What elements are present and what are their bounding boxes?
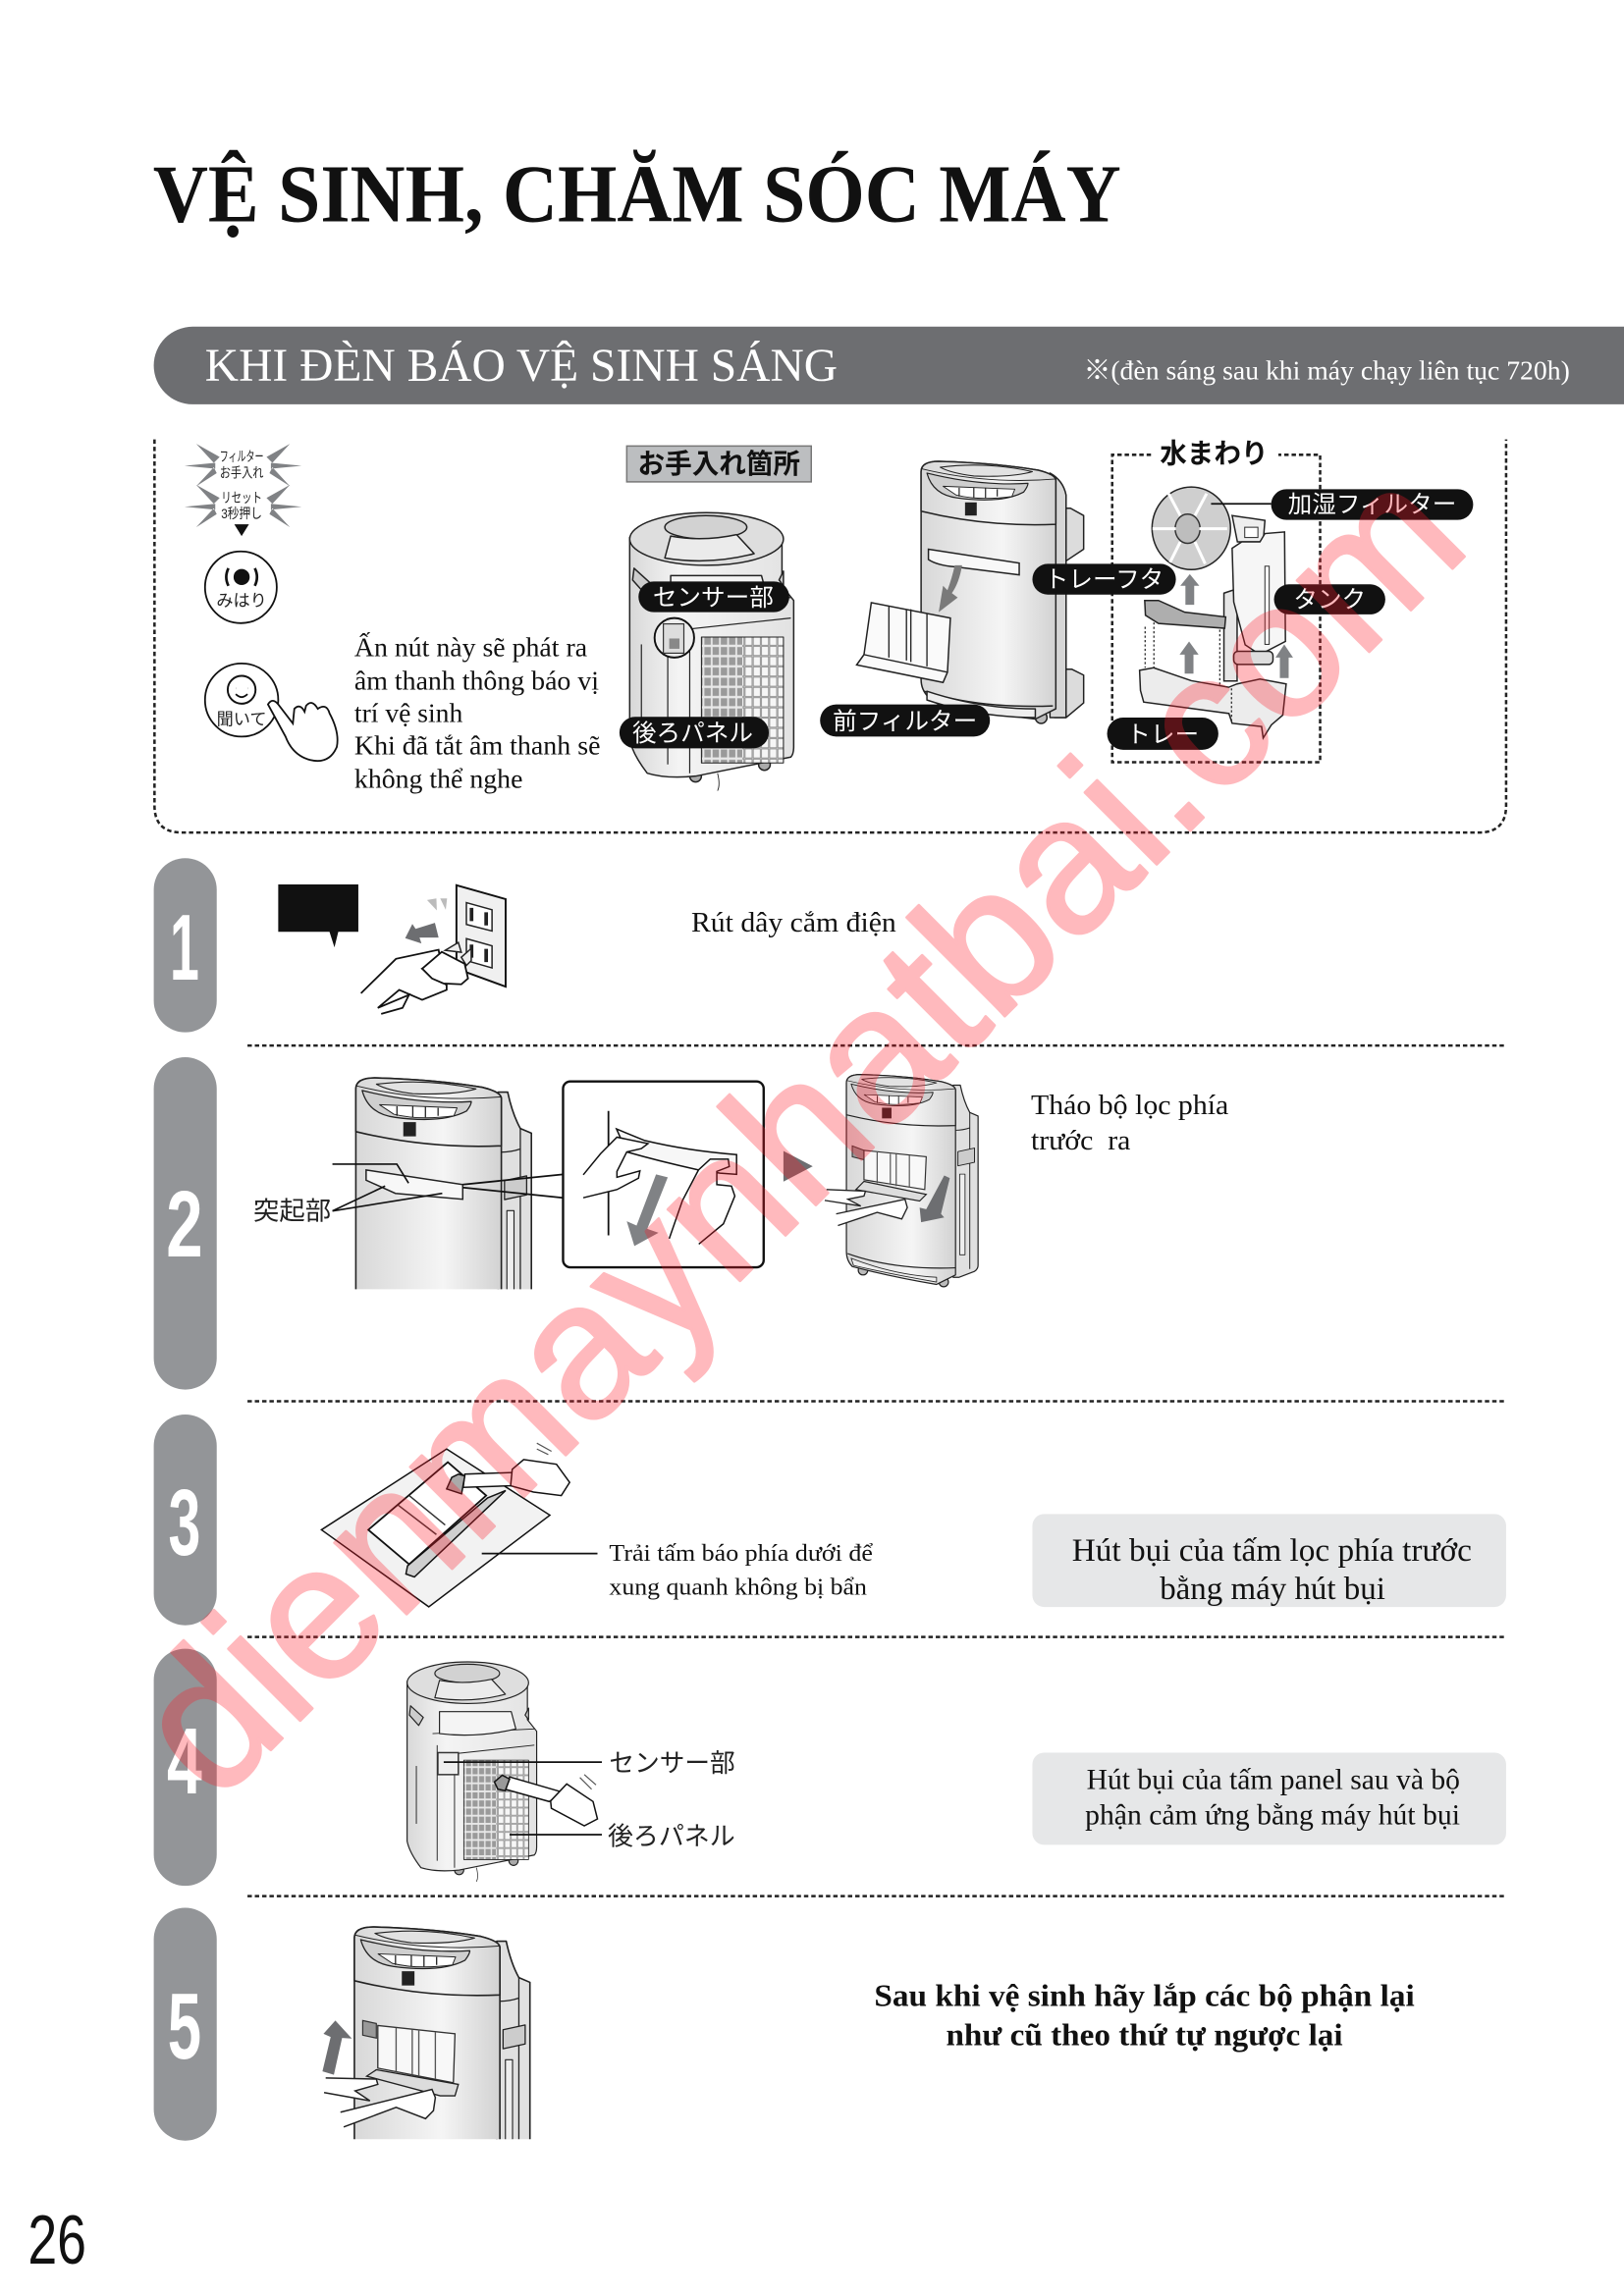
step 1 badge [154,858,217,1033]
watermark: dienmaynhatbai.com [93,425,1502,1835]
step 4 callout: phận cảm ứng bằng máy hút bụi [1085,1800,1460,1832]
icon: listen button with hand [205,664,338,761]
step 1 text: Rút dây cắm điện [691,908,896,938]
arrow: next [784,1150,813,1182]
step 2 illustration: filter pulled out [825,1075,978,1287]
step 3 badge [154,1415,217,1626]
step 2 detail box: pull filter [563,1082,764,1267]
icon: reset button flashing labels: フィルター [220,450,263,465]
label: front filter [820,705,990,736]
step 3 callout: Hút bụi của tấm lọc phía trước [1072,1533,1472,1569]
arrows: lift parts up [1179,574,1293,678]
step 3 caption [609,1541,873,1600]
text: sound notification note [354,631,600,794]
tray [1140,667,1286,738]
icon: reset button flashing labels: リセット [221,491,262,507]
step 2 illustration: machine with protrusions: 突起部 [253,1197,331,1226]
step 2 badge [154,1057,217,1390]
icon: watch button [205,552,277,623]
label: tray [1108,718,1218,750]
step 5 text: Sau khi vệ sinh hãy lắp các bộ phận lại [874,1978,1415,2012]
front filter part [856,603,950,682]
label: sensor [638,581,789,613]
label: tank [1274,584,1385,614]
step 5 text: như cũ theo thứ tự ngược lại [946,2018,1343,2053]
step 3 badge: 3 [169,1471,200,1575]
step 3 callout [1032,1514,1506,1607]
icon: watch button: みはり [216,591,267,611]
label: rear panel [620,717,769,748]
step 5 text [874,1978,1415,2053]
label: sensor: センサー部 [653,584,774,612]
step 5 badge: 5 [168,1975,201,2079]
panel: water parts [1112,439,1321,763]
illustration: front of machine with filter removed [856,461,1084,723]
step 2 text [1031,1091,1229,1156]
step 4 badge [154,1649,217,1886]
label: front filter: 前フィルター [833,708,977,735]
step 2 text: Tháo bộ lọc phía [1031,1091,1229,1121]
illustration: rear of machine [629,512,793,791]
step 2 text: trước ra [1031,1126,1131,1156]
step 4 callout: Hút bụi của tấm panel sau và bộ [1087,1765,1460,1796]
label: tray lid: トレーフタ [1045,566,1164,593]
text: sound notification note: Khi đã tắt âm thanh sẽ [354,729,600,760]
label: rear panel: 後ろパネル [632,720,753,747]
step 2 illustration: machine with protrusions [254,1077,562,1290]
label: tank: タンク [1293,587,1366,614]
icon: reset button flashing labels: 3秒押し [221,507,262,522]
step 1 illustration: unplug [278,884,506,1014]
step 3 callout: bằng máy hút bụi [1160,1572,1385,1607]
icon: reset button flashing labels: お手入れ [220,465,263,481]
title: VỆ SINH, CHĂM SÓC MÁY [153,149,1121,240]
panel: maintenance locations [154,439,1506,832]
arrow: pull filter down [939,565,965,613]
icon: reset button flashing labels [185,444,301,536]
panel: water parts: 水まわり [1160,439,1269,469]
heading: maintenance points: お手入れ箇所 [638,449,800,479]
icon: listen button with hand: 聞いて [217,709,267,728]
step 4 illustration: vacuum rear panel [407,1662,735,1882]
label: humidifying filter: 加湿フィルター [1288,491,1456,518]
humidifying filter disc [1152,487,1272,569]
banner: cleaning indicator [154,327,1624,404]
text: sound notification note: âm thanh thông báo vị [354,666,599,696]
step 5 illustration: reinstall filter [322,1926,531,2140]
step 4 callout [1032,1752,1506,1844]
text: sound notification note: không thể nghe [354,764,522,794]
label: tray: トレー [1126,721,1199,748]
step 3 caption: xung quanh không bị bẩn [609,1575,867,1600]
banner: cleaning indicator: KHI ĐÈN BÁO VỆ SINH SÁNG [205,340,838,392]
text: sound notification note: Ấn nút này sẽ phát ra [354,631,587,662]
tank [1224,515,1285,681]
step 3 caption: Trải tấm báo phía dưới để [609,1541,873,1567]
step 4 illustration: vacuum rear panel: 後ろパネル [608,1821,735,1850]
step 1 badge: 1 [170,896,199,1000]
step 4 illustration: vacuum rear panel: センサー部 [609,1748,735,1778]
page number: 26 [27,2202,86,2278]
step 3 illustration: vacuum filter on newspaper [321,1443,598,1607]
tray lid [1145,601,1225,628]
step 2 badge: 2 [166,1173,203,1277]
step 4 badge: 4 [167,1710,202,1814]
step 5 badge [154,1908,217,2141]
banner: cleaning indicator: ※(đèn sáng sau khi máy chạy liên tục 720h) [1084,354,1570,385]
text: sound notification note: trí vệ sinh [354,697,462,727]
